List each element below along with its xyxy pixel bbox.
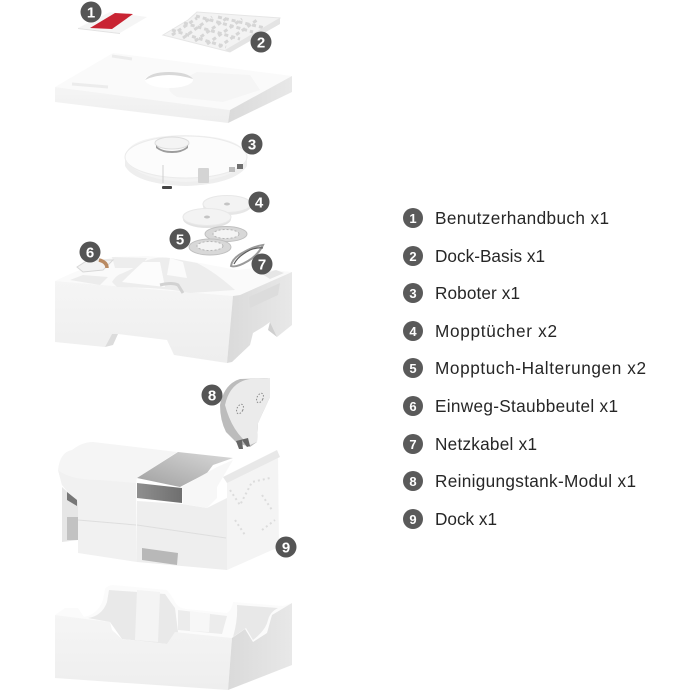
legend row 4: Mopptücher x2: [435, 321, 557, 341]
legend row 3: 3: [409, 286, 417, 301]
item 1: user manual: [78, 12, 147, 34]
legend row 2: Dock-Basis x1: [435, 246, 545, 266]
legend row 6: Einweg-Staubbeutel x1: [435, 396, 618, 416]
callout 2: 2: [257, 34, 265, 52]
legend row 8: 8: [409, 474, 417, 489]
foam box bottom: [55, 585, 292, 690]
legend row 6: 6: [409, 399, 417, 414]
foam box middle: [55, 256, 292, 363]
legend row 1: Benutzerhandbuch x1: [435, 208, 609, 228]
callout 9: [276, 536, 296, 558]
callout 7: [252, 254, 272, 274]
legend row 9: Dock x1: [435, 509, 497, 529]
legend row 3: Roboter x1: [435, 283, 520, 303]
item 7: power cable: [231, 245, 263, 266]
legend row 7: Netzkabel x1: [435, 434, 537, 454]
legend row 7: 7: [409, 437, 417, 452]
legend: [403, 208, 646, 529]
foam tray top: [55, 53, 292, 123]
callout 8: 8: [208, 388, 216, 404]
legend row 9: 9: [409, 512, 417, 527]
callout 3: 3: [248, 136, 256, 154]
callout 5: 5: [176, 232, 184, 248]
callout 3: [242, 134, 262, 154]
item 3: robot vacuum: [125, 135, 247, 189]
callout 1: [80, 2, 102, 22]
item 8: cleaning tank module: [220, 378, 270, 449]
legend row 1: 1: [409, 211, 417, 226]
callout 9: 9: [282, 540, 290, 556]
item 2: dock base plate: [163, 12, 280, 52]
callout 6: 6: [86, 244, 94, 262]
callout 4: [248, 192, 270, 212]
callout 4: 4: [255, 194, 264, 212]
callout 7: 7: [258, 256, 266, 274]
item 5: mop holders: [189, 226, 247, 255]
legend row 9: [403, 509, 497, 529]
item 4: mop cloths: [183, 196, 251, 228]
legend row 5: 5: [409, 361, 417, 376]
callout 2: [250, 32, 272, 52]
callout 5: [170, 228, 190, 250]
callout 8: [202, 384, 222, 406]
legend row 2: 2: [409, 249, 417, 264]
callout 6: [80, 242, 100, 262]
item 9: dock: [58, 442, 280, 570]
callout 1: 1: [87, 4, 95, 22]
legend row 8: Reinigungstank-Modul x1: [435, 471, 636, 491]
legend row 4: 4: [409, 324, 417, 339]
legend row 5: Mopptuch-Halterungen x2: [435, 358, 646, 378]
item 6: disposable dust bags: [77, 260, 113, 272]
